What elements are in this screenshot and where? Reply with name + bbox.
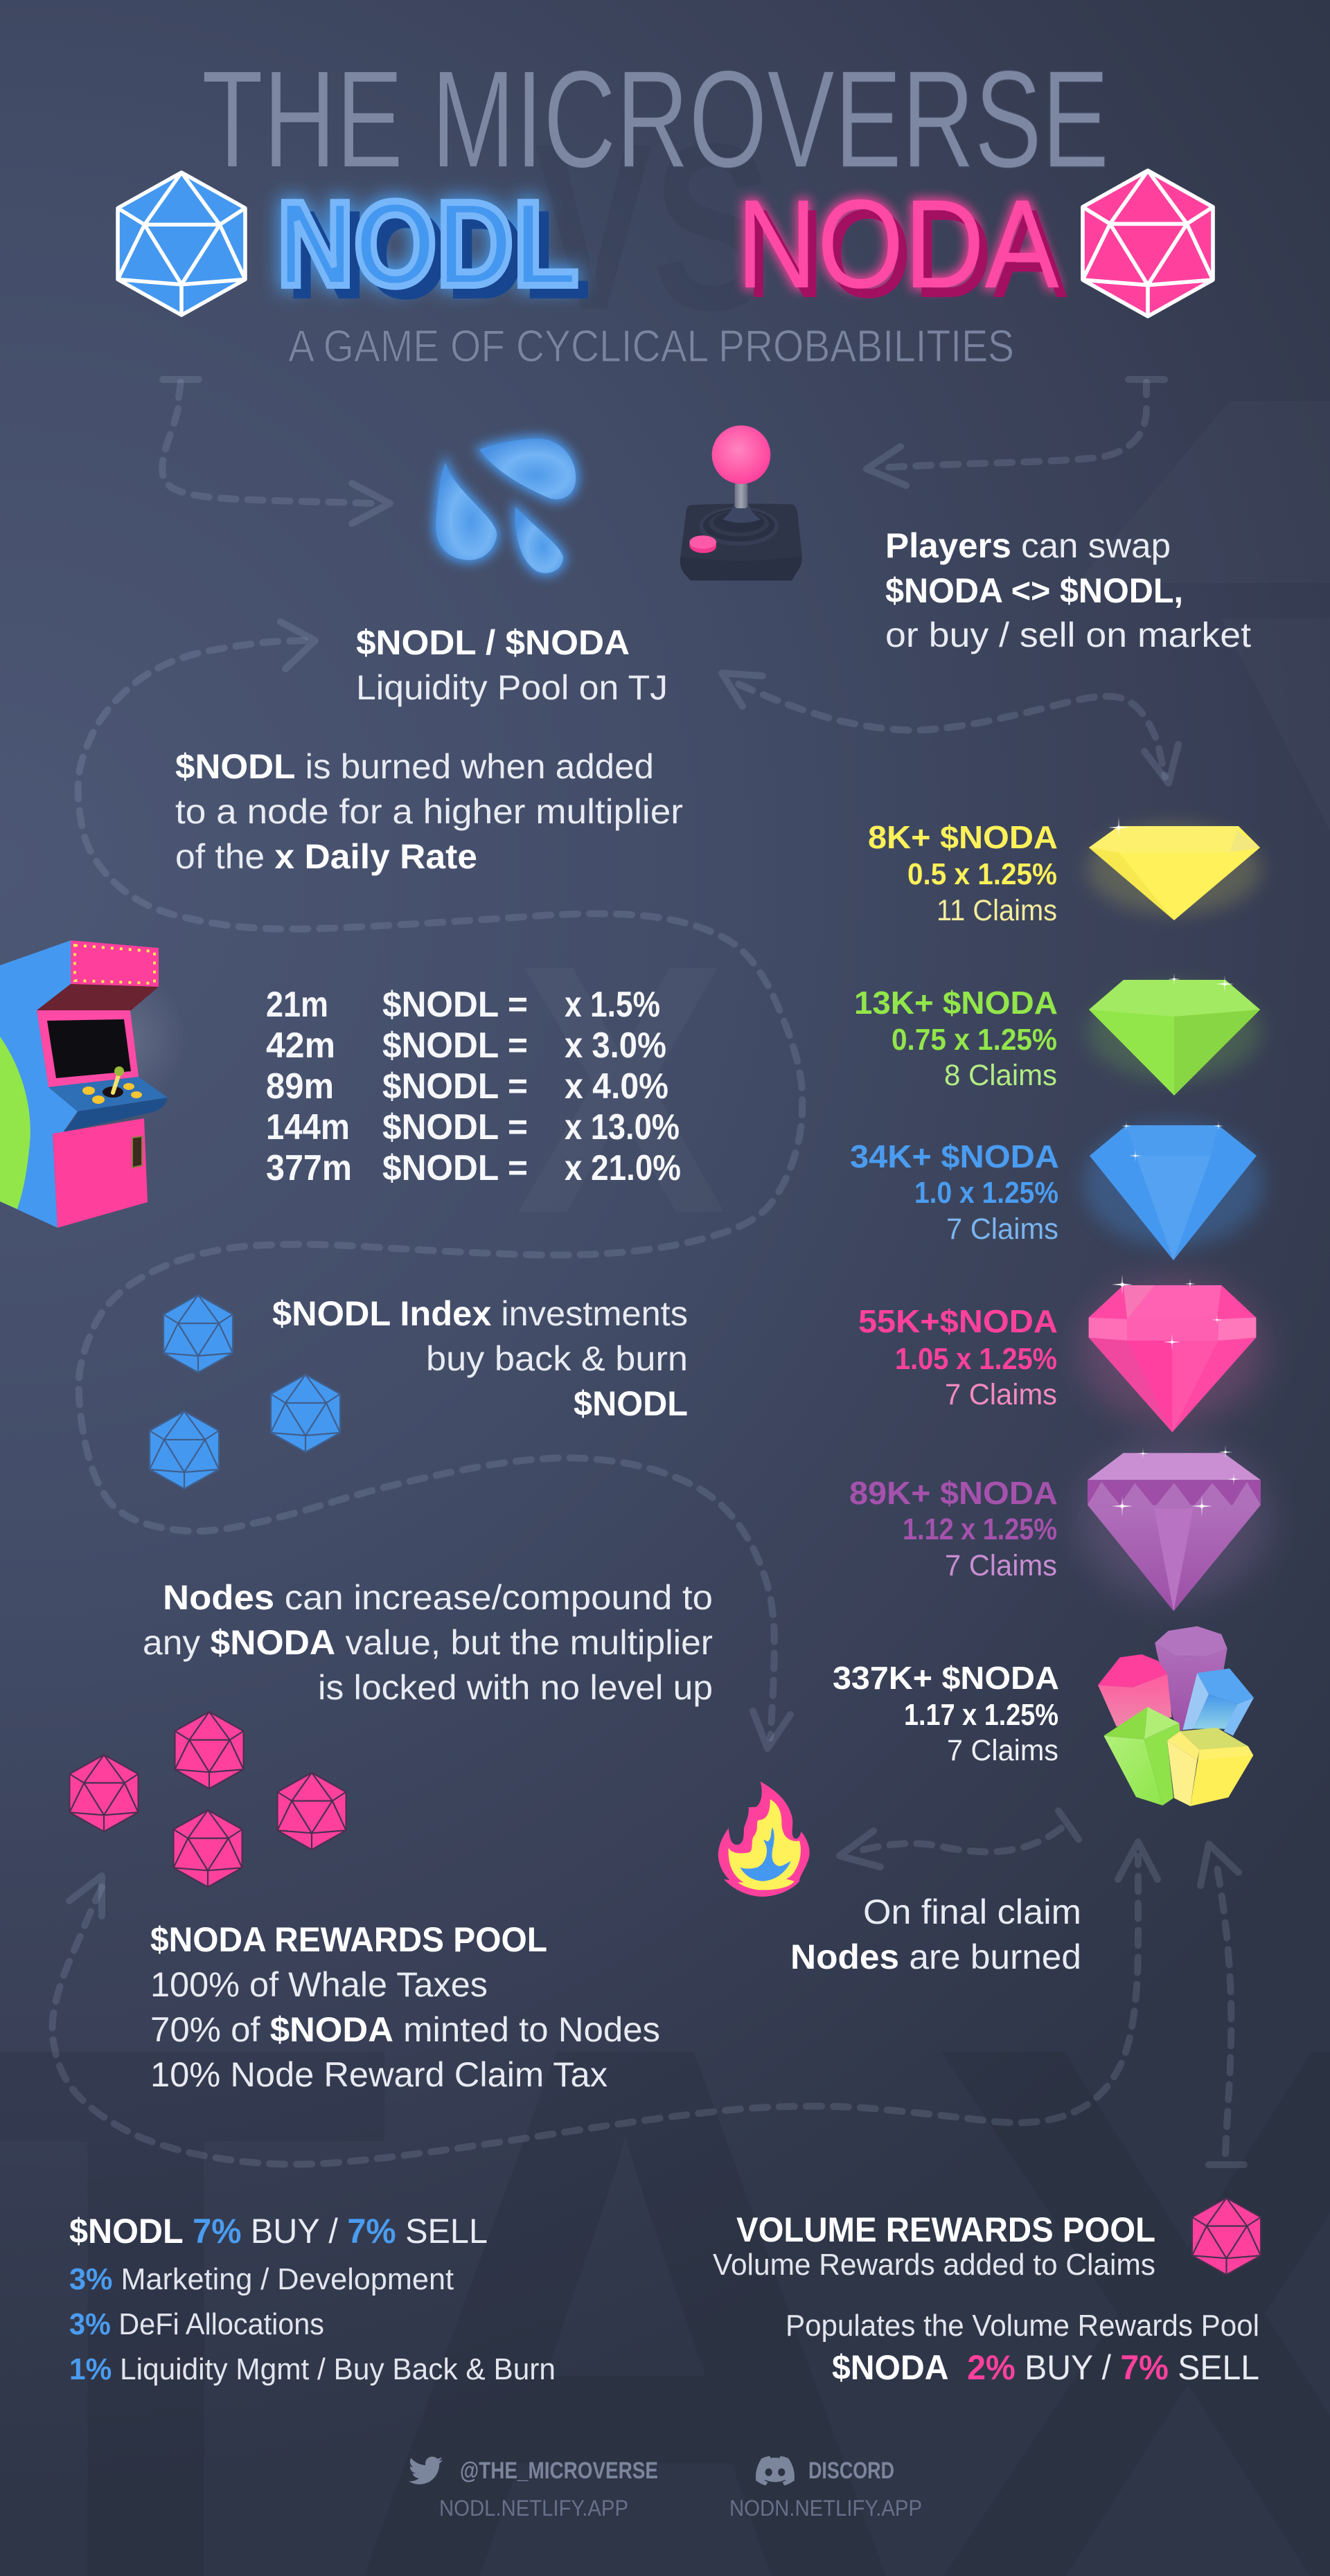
icon: flame [718,1782,810,1897]
table: NODL multipliers: 144m [266,1107,350,1147]
watermark: top right shape [1077,401,1330,831]
text: NODL index: $NODL Index investments [272,1294,688,1333]
text: NODA rewards pool [150,1920,660,2094]
text: burn description [175,747,683,876]
gem row: 55K [858,1274,1266,1432]
gem row: 13K [854,973,1261,1095]
gem row: 34K: 1.0 x 1.25% [914,1176,1058,1210]
arrow: cluster to flame [840,1811,1079,1867]
gem row: 34K [850,1121,1264,1260]
dashed flow arrows [53,379,1244,2165]
gem row: 337K: 337K+ $NODA [833,1660,1059,1696]
NODL neon logo: NODL [277,176,578,311]
gem row: 8K: 8K+ $NODA [868,819,1058,855]
table: NODL multipliers: x 21.0% [565,1148,681,1188]
gem row: 55K: 55K+$NODA [858,1303,1058,1339]
text: volume rewards pool: $NODA 2% BUY / 7% SELL [832,2348,1259,2387]
text: NODL taxes: 3% DeFi Allocations [69,2307,324,2341]
gem row: 13K: 8 Claims [944,1059,1057,1092]
NODA neon logo: NODA [736,173,1060,314]
gem row: 337K: 1.17 x 1.25% [904,1698,1058,1732]
arrow: serpentine path [78,622,802,1748]
footer: discord: NODN.NETLIFY.APP [729,2496,922,2521]
gem row: 89K [849,1440,1271,1611]
text: final claim: On final claim [863,1893,1081,1931]
gem row: 55K: 7 Claims [945,1378,1057,1411]
footer: twitter: NODL.NETLIFY.APP [439,2496,628,2521]
table: NODL multipliers: $NODL = [382,1066,528,1107]
icon: twitter [409,2457,443,2485]
text: liquidity pool: Liquidity Pool on TJ [356,668,668,707]
illustration: arcade machine [0,940,187,1228]
watermark: VS: VS [534,93,772,359]
text: final claim [790,1893,1081,1976]
icon: liquidity drops [436,439,576,573]
text: burn description: $NODL is burned when added [175,747,654,786]
text: liquidity pool: $NODL / $NODA [356,623,630,662]
text: NODL taxes: 1% Liquidity Mgmt / Buy Back & Burn [69,2352,556,2386]
table: NODL multipliers: x 4.0% [565,1066,668,1107]
gem row: 34K: 34K+ $NODA [850,1138,1059,1174]
text: NODA rewards pool: $NODA REWARDS POOL [150,1920,547,1959]
footer: discord [729,2456,922,2521]
gem row: 8K [868,817,1261,927]
gem row: 13K: 0.75 x 1.25% [892,1023,1057,1057]
subtitle: A GAME OF CYCLICAL PROBABILITIES [288,321,1014,371]
icons: pink dice [69,1712,346,1887]
gem row: 8K: 0.5 x 1.25% [907,857,1057,891]
table: NODL multipliers: x 1.5% [565,985,660,1025]
table: NODL multipliers: 42m [266,1026,335,1066]
text: volume rewards pool: VOLUME REWARDS POOL [736,2210,1155,2249]
text: NODA rewards pool: 10% Node Reward Claim Tax [150,2055,608,2094]
arrow: top left to liquidity [162,379,390,524]
table: NODL multipliers: x 13.0% [565,1107,680,1147]
table: NODL multipliers [266,985,681,1188]
text: volume rewards pool: Populates the Volume Rewards Pool [786,2309,1259,2343]
gem row: 13K: 13K+ $NODA [854,985,1058,1021]
text: players swap: Players can swap [885,526,1171,565]
footer: discord: DISCORD [808,2458,894,2484]
table: NODL multipliers: $NODL = [382,1107,528,1147]
table: NODL multipliers: $NODL = [382,1026,528,1066]
watermark: X: X [515,891,728,1287]
text: nodes compound: any $NODA value, but the multiplier [143,1623,713,1662]
text: volume rewards pool [713,2210,1259,2387]
gem row: 55K: 1.05 x 1.25% [895,1342,1057,1376]
text: NODL taxes: 3% Marketing / Development [69,2262,454,2296]
text: NODA rewards pool: 100% of Whale Taxes [150,1965,488,2004]
text: nodes compound: Nodes can increase/compound to [163,1578,713,1617]
table: NODL multipliers: 377m [266,1148,352,1188]
text: NODL index: buy back & burn [426,1339,688,1378]
gem row: 89K: 89K+ $NODA [849,1475,1058,1511]
text: NODL index [272,1294,688,1423]
text: volume rewards pool: Volume Rewards added to Claims [713,2248,1155,2282]
text: nodes compound: is locked with no level up [318,1668,713,1707]
gem row: 34K: 7 Claims [946,1213,1058,1246]
gem row: 337K [833,1626,1254,1806]
arrow: volume pool to cluster [1200,1844,1244,2165]
text: final claim: Nodes are burned [790,1938,1081,1976]
NODA neon logo: NODA [745,183,1068,324]
table: NODL multipliers: 89m [266,1066,334,1107]
illustration: crystal cluster [1098,1626,1254,1806]
text: NODA rewards pool: 70% of $NODA minted to Nodes [150,2010,660,2049]
text: nodes compound [143,1578,713,1707]
text: liquidity pool [356,623,668,707]
icon: blue d20 [118,172,245,315]
icon: discord [756,2456,795,2485]
NODL neon logo: NODL [288,187,589,322]
table: NODL multipliers: $NODL = [382,1148,528,1188]
arrow: liquidity to gems [722,673,1178,783]
footer: twitter: @THE_MICROVERSE [460,2458,658,2484]
text: burn description: to a node for a higher multiplier [175,792,683,831]
text: players swap: $NODA <> $NODL, [885,571,1183,610]
table: NODL multipliers: 21m [266,985,328,1025]
icon: joystick [680,425,802,580]
gem row: 8K: 11 Claims [937,894,1057,927]
text: NODL taxes [69,2212,556,2386]
text: NODL taxes: $NODL 7% BUY / 7% SELL [69,2212,488,2251]
NODL neon logo: NODL [277,176,578,311]
footer: twitter [409,2457,658,2521]
text: players swap: or buy / sell on market [885,616,1251,654]
icons: blue dice [150,1295,340,1489]
NODA neon logo: NODA [736,173,1060,314]
icon: volume pool die [1192,2198,1261,2275]
gem row: 89K: 1.12 x 1.25% [903,1512,1057,1546]
icon: pink d20 [1083,170,1213,316]
gem row: 89K: 7 Claims [945,1549,1057,1582]
arrow: top right to players [867,379,1164,485]
text: NODL index: $NODL [574,1384,688,1423]
table: NODL multipliers: x 3.0% [565,1026,666,1066]
table: NODL multipliers: $NODL = [382,985,528,1025]
text: burn description: of the x Daily Rate [175,837,477,876]
text: players swap [885,526,1251,654]
gem row: 337K: 7 Claims [947,1734,1058,1767]
arrow: rewards loop [53,1842,1158,2164]
